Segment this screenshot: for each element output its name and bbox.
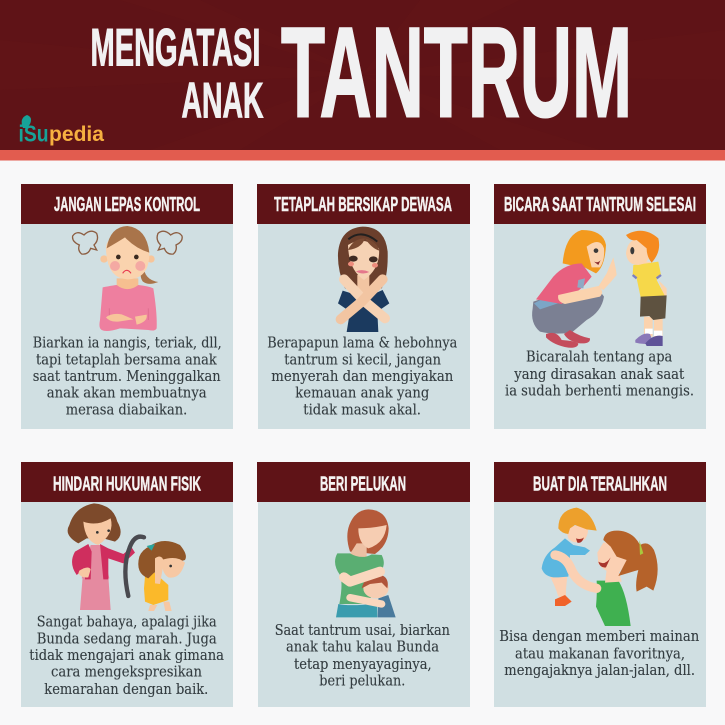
text: beri pelukan: beri pelukan. <box>319 674 405 690</box>
panel: tetaplah bersikap dewasa <box>257 184 470 429</box>
logo: iSupedia <box>18 115 104 146</box>
panel: buat dia teralihkan <box>494 462 706 707</box>
text: jangan lepas kontrol: Biarkan ia nangis, teriak, dll, <box>33 336 222 352</box>
panel heading: beri pelukan: BERI PELUKAN <box>320 474 406 496</box>
logo: iSupedia: pedia <box>49 123 104 146</box>
panel heading: tetaplah bersikap dewasa: TETAPLAH BERSIKAP DEWASA <box>274 194 452 216</box>
panel heading: jangan lepas kontrol <box>21 184 233 224</box>
panel heading: bicara saat tantrum selesai <box>494 184 706 224</box>
panel heading: hindari hukuman fisik: HINDARI HUKUMAN FISIK <box>53 474 201 496</box>
text: jangan lepas kontrol: anak akan membuatnya <box>47 386 207 402</box>
panel heading: buat dia teralihkan <box>494 462 706 502</box>
icon: mother lifting baby <box>542 508 658 626</box>
text: bicara saat tantrum selesai <box>505 350 694 400</box>
logo: iSupedia: iSu <box>18 120 48 146</box>
text: hindari hukuman fisik: kemarahan dengan baik. <box>44 682 208 698</box>
text: buat dia teralihkan <box>499 629 699 679</box>
panel: bicara saat tantrum selesai <box>494 184 706 429</box>
panel: hindari hukuman fisik <box>21 462 233 707</box>
text: tetaplah bersikap dewasa: kemauan anak yang <box>295 386 429 402</box>
text: bicara saat tantrum selesai: yang dirasakan anak saat <box>513 367 684 383</box>
text: bicara saat tantrum selesai: Bicaralah tentang apa <box>526 350 673 366</box>
text: hindari hukuman fisik <box>29 615 224 698</box>
icon: mother hugging child <box>335 509 396 617</box>
text: tetaplah bersikap dewasa <box>267 336 458 418</box>
header banner <box>0 0 725 160</box>
panel: beri pelukan <box>257 462 470 707</box>
icon: mother talking to child <box>532 230 667 348</box>
text: jangan lepas kontrol: merasa diabaikan. <box>66 402 187 418</box>
icon: angry woman with steam clouds <box>73 226 182 331</box>
text: buat dia teralihkan: Bisa dengan memberi mainan <box>499 629 699 645</box>
text: buat dia teralihkan: atau makanan favoritnya, <box>515 646 685 662</box>
text: bicara saat tantrum selesai: ia sudah berhenti menangis. <box>505 384 694 400</box>
text: tetaplah bersikap dewasa: menyerah dan mengiyakan <box>271 369 453 385</box>
title: ANAK <box>182 72 264 128</box>
text: beri pelukan <box>275 623 450 690</box>
text: hindari hukuman fisik: Sangat bahaya, apalagi jika <box>37 615 217 631</box>
text: tetaplah bersikap dewasa: Berapapun lama & hebohnya <box>267 336 458 352</box>
panel heading: beri pelukan <box>257 462 470 502</box>
title <box>90 2 632 144</box>
text: jangan lepas kontrol: saat tantrum. Meninggalkan <box>33 369 221 385</box>
icon: mother with belt and scared girl <box>68 503 186 611</box>
text: hindari hukuman fisik: cara mengekspresikan <box>51 665 202 681</box>
panel: jangan lepas kontrol <box>21 184 233 429</box>
text: hindari hukuman fisik: Bunda sedang marah. Juga <box>37 631 217 647</box>
title: MENGATASI <box>90 18 260 78</box>
icon: woman crossing arms <box>338 227 389 332</box>
text: tetaplah bersikap dewasa: tantrum si kecil, jangan <box>284 352 441 368</box>
panel heading: jangan lepas kontrol: JANGAN LEPAS KONTROL <box>54 194 200 216</box>
text: beri pelukan: Saat tantrum usai, biarkan <box>275 623 450 639</box>
text: beri pelukan: tetap menyayaginya, <box>294 657 432 673</box>
text: buat dia teralihkan: mengajaknya jalan-jalan, dll. <box>504 663 695 679</box>
text: beri pelukan: anak tahu kalau Bunda <box>286 640 439 656</box>
text: jangan lepas kontrol: tapi tetaplah bersama anak <box>36 352 217 368</box>
text: hindari hukuman fisik: tidak mengajari anak gimana <box>29 648 224 664</box>
panel heading: hindari hukuman fisik <box>21 462 233 502</box>
text: tetaplah bersikap dewasa: tidak masuk akal. <box>303 402 421 418</box>
text: jangan lepas kontrol <box>33 336 222 418</box>
panel heading: tetaplah bersikap dewasa <box>257 184 470 224</box>
